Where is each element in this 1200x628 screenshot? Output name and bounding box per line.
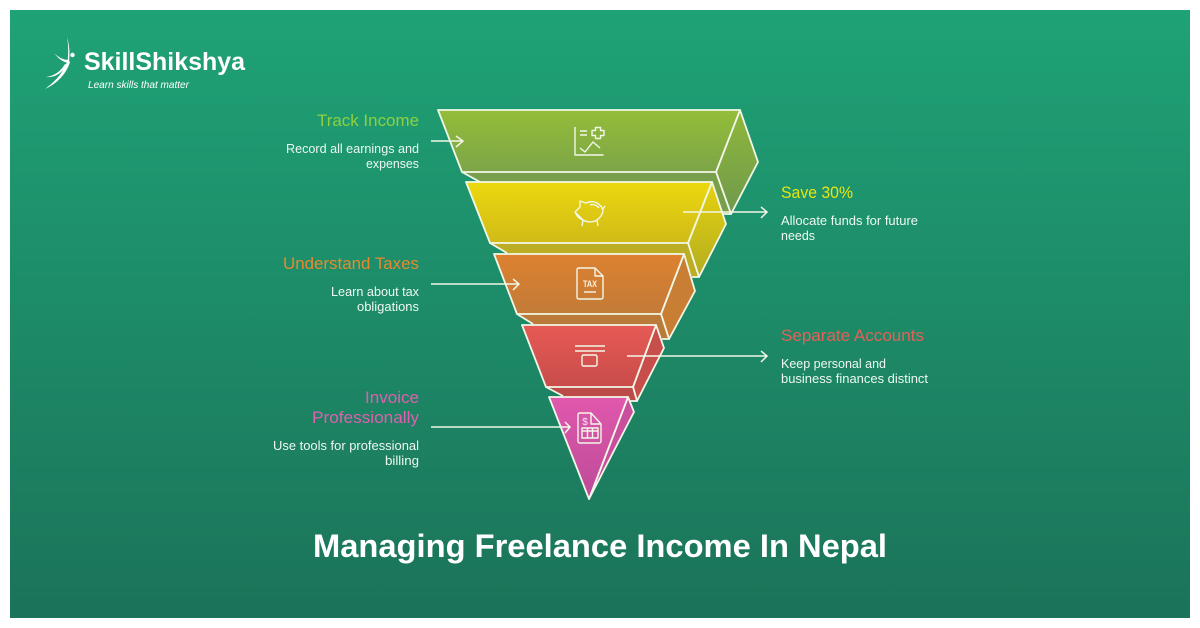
description: business finances distinct xyxy=(781,372,929,386)
arrow xyxy=(431,136,463,147)
description: Keep personal and xyxy=(781,357,886,371)
heading: Professionally xyxy=(312,408,420,427)
description xyxy=(781,357,929,386)
arrow xyxy=(683,207,767,218)
icon: tax document xyxy=(577,268,603,299)
icon: invoice sheet: $ xyxy=(582,417,588,428)
icon: tray xyxy=(575,346,605,366)
funnel chart xyxy=(438,110,758,499)
funnel level 5: invoice xyxy=(549,397,634,499)
icon: leaping figure xyxy=(45,37,75,89)
description xyxy=(286,142,419,171)
callout: separate accounts xyxy=(627,326,929,386)
logo tagline: Learn skills that matter xyxy=(88,79,189,91)
icon: chart with plus xyxy=(575,127,604,155)
funnel level 1: track income xyxy=(438,110,758,214)
callout: understand taxes xyxy=(283,254,519,314)
description: Allocate funds for future xyxy=(781,214,918,228)
description: Record all earnings and xyxy=(286,142,419,156)
description: expenses xyxy=(366,157,419,171)
title: Managing Freelance Income In Nepal xyxy=(313,528,887,564)
callout: track income xyxy=(286,111,463,171)
heading: Separate Accounts xyxy=(781,326,924,345)
description: billing xyxy=(385,454,419,468)
heading xyxy=(312,388,420,427)
description: needs xyxy=(781,229,815,243)
icon: piggy bank xyxy=(575,201,605,226)
funnel level 3: understand taxes xyxy=(494,254,695,339)
heading: Invoice xyxy=(365,388,419,407)
heading: Understand Taxes xyxy=(283,254,419,273)
description xyxy=(331,285,420,314)
description: obligations xyxy=(357,300,419,314)
heading: Track Income xyxy=(317,111,419,130)
arrow xyxy=(627,351,767,362)
callout: save 30% xyxy=(683,183,918,243)
heading: Save 30% xyxy=(781,183,853,202)
funnel level 2: save 30% xyxy=(466,182,726,277)
funnel level 4: separate accounts xyxy=(522,325,664,401)
arrow xyxy=(431,279,519,290)
description xyxy=(781,214,918,243)
description xyxy=(273,439,419,468)
logo wordmark: SkillShikshya xyxy=(84,48,246,76)
callout: invoice professionally xyxy=(273,388,570,468)
logo: SkillShikshya xyxy=(45,37,246,91)
description: Use tools for professional xyxy=(273,439,419,453)
arrow xyxy=(431,422,570,433)
description: Learn about tax xyxy=(331,285,420,299)
icon: tax document: TAX xyxy=(583,279,597,289)
